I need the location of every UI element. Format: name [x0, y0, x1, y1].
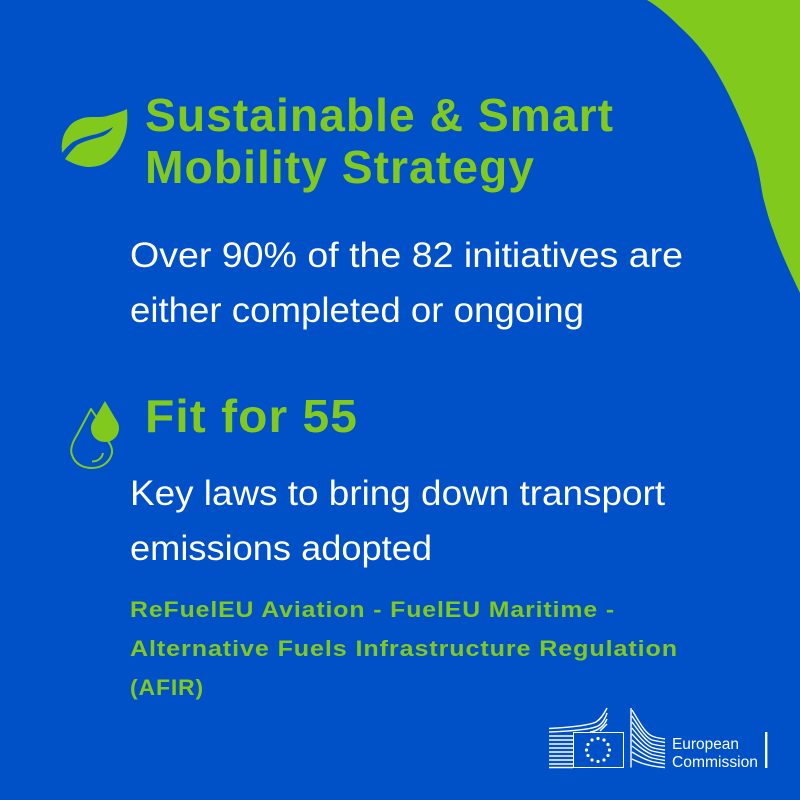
logo: stars	[585, 737, 611, 763]
text: regulations: ReFuelEU Aviation - FuelEU Maritime -	[130, 597, 615, 622]
text: initiatives: Over 90% of the 82 initiatives are	[130, 236, 683, 275]
text: key laws	[130, 474, 665, 568]
logo: European Commission	[549, 708, 767, 771]
logo: wordmark: Commission	[672, 754, 758, 771]
heading: Sustainable & Smart Mobility Strategy: Sustainable & Smart	[145, 89, 614, 141]
logo: left building	[549, 708, 607, 768]
text: regulations: Alternative Fuels Infrastructure Regulation	[130, 636, 678, 661]
heading: Sustainable & Smart Mobility Strategy	[145, 89, 614, 193]
heading: Fit for 55: Fit for 55	[145, 390, 358, 442]
logo: right building	[631, 708, 665, 768]
green corner shape	[647, 0, 800, 293]
text: regulations	[130, 597, 678, 700]
text: initiatives: either completed or ongoing	[130, 291, 584, 330]
text: key laws: emissions adopted	[130, 529, 432, 568]
icon: drops	[71, 401, 119, 468]
logo: flag box	[574, 732, 624, 768]
logo: wordmark: European	[672, 736, 739, 753]
logo: vertical rule	[765, 732, 767, 768]
heading: Sustainable & Smart Mobility Strategy: Mobility Strategy	[145, 141, 535, 193]
text: regulations: (AFIR)	[130, 675, 204, 700]
logo: wordmark	[672, 736, 758, 771]
text: initiatives	[130, 236, 683, 330]
text: key laws: Key laws to bring down transport	[130, 474, 665, 513]
icon: leaf	[62, 109, 127, 167]
